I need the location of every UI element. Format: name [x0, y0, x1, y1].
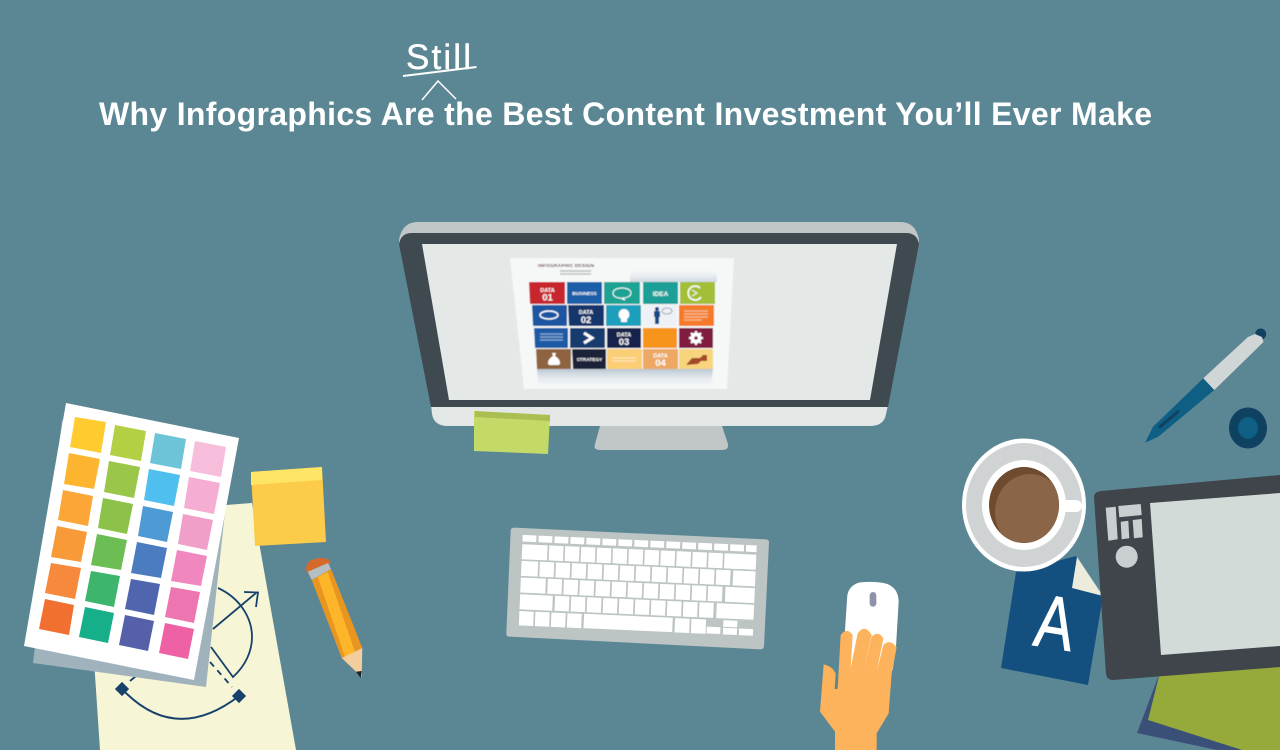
monitor screen [422, 244, 897, 400]
desktop monitor [399, 222, 919, 450]
monitor stand [595, 426, 728, 450]
tile labels: DATA [540, 288, 555, 294]
font document [1001, 556, 1103, 685]
arrow [213, 592, 258, 629]
pen holder dot [1229, 408, 1267, 448]
tile row 3 [534, 328, 713, 348]
icon: handshake [686, 355, 707, 365]
document page [1001, 556, 1103, 685]
holder inner [1238, 417, 1258, 439]
dashed handle [210, 662, 232, 687]
tile labels: DATA [579, 310, 593, 316]
mouse body [845, 582, 899, 670]
infographic sheet [510, 258, 734, 389]
right anchor point [232, 689, 246, 703]
swatches column 2 [79, 425, 146, 643]
tile labels: DATA [653, 354, 668, 360]
tile labels: 04 [655, 358, 666, 369]
sheet upper shadow [630, 268, 717, 282]
icon: speech bubble [613, 288, 631, 300]
swatches column 3 [119, 433, 186, 651]
title [99, 38, 1152, 132]
on-screen infographic [510, 258, 734, 389]
swatches column 1 [39, 417, 106, 635]
sticky body [251, 467, 326, 546]
pencil tip [356, 671, 362, 678]
bottom letter row [520, 594, 754, 620]
curved arc [211, 588, 252, 677]
pen grip [1145, 378, 1214, 443]
sheet shadow [33, 420, 226, 687]
cup handle [1060, 500, 1082, 512]
holder outer [1229, 408, 1267, 448]
folded corner [1072, 557, 1103, 596]
icon: cycle arrow [688, 286, 701, 300]
coffee dark [989, 467, 1059, 543]
sticky adhesive strip [251, 467, 322, 485]
tile labels: BUSINESS [572, 291, 598, 297]
coffee cup [962, 438, 1086, 572]
design paper [94, 503, 296, 750]
home row [520, 578, 755, 603]
coffee light [995, 474, 1059, 543]
pen grip detail [1160, 412, 1178, 427]
tablet shortcut keys [1106, 504, 1143, 541]
pencil centre stripe [318, 572, 355, 657]
coloured paper behind tablet [1137, 660, 1280, 750]
tile labels: DATA [617, 332, 631, 338]
left anchor point [115, 682, 129, 696]
space row [519, 611, 753, 636]
dashed handle left [130, 676, 136, 681]
handwritten underline [403, 67, 476, 76]
monitor top edge [399, 222, 919, 245]
saucer [966, 443, 1082, 567]
infographic heading: INFOGRAPHIC DESIGN [538, 263, 595, 268]
sticky body [474, 411, 550, 454]
mouse scroll wheel [870, 592, 876, 607]
colour swatch sheet [24, 403, 239, 687]
graphics tablet [1094, 475, 1280, 680]
vector drawing on paper [115, 588, 258, 719]
sticky adhesive strip [475, 411, 550, 421]
tablet dial [1116, 546, 1138, 568]
pen end cap [1255, 328, 1266, 340]
icon: arrow chevron [584, 333, 592, 343]
pencil wood cone [342, 648, 362, 677]
stylus pen [1145, 328, 1266, 443]
icon: globe [540, 311, 558, 319]
keyboard keys [519, 538, 757, 636]
navy paper [1137, 660, 1280, 750]
tile row 1 [529, 282, 715, 304]
swatch sheet [24, 403, 239, 680]
yellow sticky note [251, 467, 326, 546]
mouse and hand [820, 582, 899, 750]
sheet lower shadow [537, 369, 713, 389]
number row [522, 544, 756, 570]
green paper [1148, 660, 1280, 750]
monitor chin [431, 405, 888, 426]
monitor bezel [399, 233, 919, 407]
letter A: A [1029, 579, 1081, 668]
infographic subheading lines [560, 271, 591, 274]
icon: person with speech bubble [654, 307, 672, 324]
icon: money bag [548, 353, 560, 365]
saucer rim [962, 438, 1086, 572]
insertion caret [422, 81, 456, 100]
tile labels: 03 [619, 337, 629, 348]
bezier curve [122, 689, 239, 719]
icon: gear [689, 331, 703, 345]
tile labels: STRATEGY [577, 357, 603, 363]
pen barrel [1203, 334, 1264, 390]
swatches column 4 [159, 441, 226, 659]
tile labels: IDEA [653, 291, 669, 298]
tile labels: 01 [542, 292, 553, 304]
keyboard [506, 528, 769, 649]
pencil [306, 558, 362, 678]
tile labels [540, 288, 669, 369]
cup rim [982, 460, 1066, 550]
pencil ferrule [308, 563, 331, 580]
tablet body [1094, 475, 1280, 680]
tile row 4 [536, 349, 713, 369]
handwritten insertion: Still: Still [406, 38, 471, 77]
tile row 2 [532, 305, 714, 326]
function row [523, 538, 757, 549]
icon: light bulb [619, 309, 629, 322]
tablet active area [1150, 493, 1280, 655]
pencil eraser [306, 558, 330, 574]
keyboard base [506, 528, 769, 649]
tile grid [529, 282, 715, 369]
tile labels: 02 [581, 315, 591, 326]
pencil body [312, 569, 362, 658]
text placeholder lines [540, 311, 708, 361]
green sticky note [474, 411, 550, 454]
top letter row [521, 561, 756, 586]
hand [820, 629, 897, 750]
title text: Why Infographics Are the Best Content Investment You’ll Ever Make [99, 96, 1152, 132]
